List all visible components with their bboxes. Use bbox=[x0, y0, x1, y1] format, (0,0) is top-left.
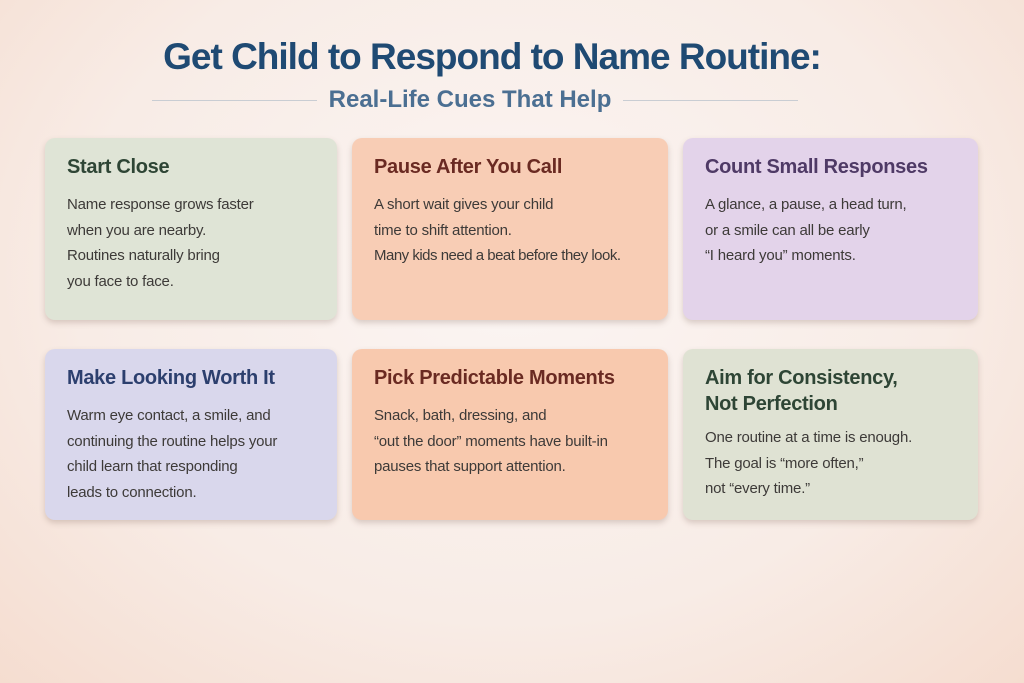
panel: aim for consistency: One routine at a time is enough. bbox=[705, 429, 912, 446]
panel: make looking worth it bbox=[45, 349, 337, 520]
title: Get Child to Respond to Name Routine: bbox=[163, 36, 821, 77]
panel: pick predictable moments: “out the door” moments have built-in bbox=[374, 432, 608, 450]
panel: make looking worth it: continuing the routine helps your bbox=[67, 432, 277, 450]
panel: count small responses: A glance, a pause, a head turn, bbox=[705, 196, 906, 213]
panel: pause after you call bbox=[352, 138, 668, 320]
panel: pause after you call: Pause After You Call bbox=[374, 156, 562, 178]
panel: start close: you face to face. bbox=[67, 272, 174, 290]
panel: count small responses: Count Small Responses bbox=[705, 156, 928, 178]
panel: start close: when you are nearby. bbox=[67, 222, 206, 238]
panel: pick predictable moments: Pick Predictable Moments bbox=[374, 367, 615, 389]
panel: start close bbox=[45, 138, 337, 320]
panel: aim for consistency: The goal is “more often,” bbox=[705, 454, 863, 472]
panel: make looking worth it: Make Looking Worth It bbox=[67, 367, 275, 389]
panel: start close: Name response grows faster bbox=[67, 196, 254, 213]
panel: count small responses bbox=[683, 138, 978, 320]
panel: start close: Routines naturally bring bbox=[67, 247, 220, 264]
panel: make looking worth it: Warm eye contact, a smile, and bbox=[67, 407, 271, 424]
panel: start close: Start Close bbox=[67, 156, 169, 178]
panel: pick predictable moments: Snack, bath, dressing, and bbox=[374, 407, 546, 424]
panel: count small responses: or a smile can all be early bbox=[705, 222, 870, 238]
panel: pick predictable moments: pauses that support attention. bbox=[374, 458, 566, 475]
panel: aim for consistency: Aim for Consistency, bbox=[705, 367, 898, 389]
panel: aim for consistency bbox=[683, 349, 978, 520]
panel: make looking worth it: leads to connection. bbox=[67, 484, 196, 500]
panel: pause after you call: A short wait gives your child bbox=[374, 196, 553, 213]
panel: count small responses: “I heard you” moments. bbox=[705, 247, 856, 264]
panel: aim for consistency: not “every time.” bbox=[705, 480, 810, 497]
subtitle: Real-Life Cues That Help bbox=[329, 86, 611, 113]
panel: pick predictable moments bbox=[352, 349, 668, 520]
panel: make looking worth it: child learn that responding bbox=[67, 458, 238, 475]
panel: pause after you call: time to shift attention. bbox=[374, 222, 512, 238]
panel: pause after you call: Many kids need a beat before they look. bbox=[374, 247, 621, 264]
panel: aim for consistency: Not Perfection bbox=[705, 393, 837, 415]
